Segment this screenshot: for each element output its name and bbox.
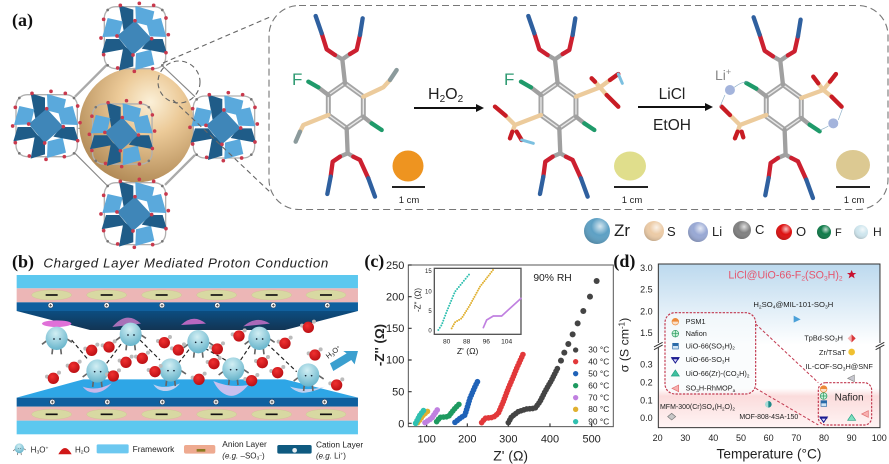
- reaction arrow LiCl EtOH: EtOH: [653, 117, 691, 134]
- x axis title: Temperature (°C): [717, 446, 821, 461]
- label Li+: Li: [715, 67, 726, 83]
- panel b legend: Anion Layer: [222, 439, 267, 449]
- x tick labels: 200: [458, 434, 476, 446]
- highlight label with star: 2: [801, 275, 805, 282]
- y tick labels: 0.3: [640, 360, 653, 370]
- panel b: charged layer proton conduction: [12, 252, 363, 462]
- labelled data points: H: [753, 300, 759, 309]
- reaction arrow H2O2: [414, 86, 484, 112]
- atom legend: [584, 218, 882, 244]
- panel b legend: O: [39, 445, 45, 454]
- hydronium ions: [42, 323, 324, 391]
- lower layers: [17, 379, 358, 434]
- label Li+: +: [726, 67, 731, 77]
- panel b legend: (e.g. Li: [316, 451, 340, 460]
- reaction arrow LiCl EtOH: LiCl: [659, 86, 685, 103]
- y tick labels: 1.5: [640, 328, 653, 338]
- atom legend: H: [873, 225, 882, 239]
- labelled data points: @MIL-101-SO: [775, 300, 825, 309]
- atom legend: Li: [712, 224, 722, 239]
- reaction arrow LiCl EtOH: [638, 86, 713, 134]
- y axis title: -Z'' (Ω): [372, 324, 387, 366]
- legend box of materials: PSM1: [686, 317, 706, 326]
- panel b legend: O: [84, 445, 90, 454]
- temperature legend: [573, 345, 609, 426]
- atom legend: O: [796, 224, 806, 239]
- inset plot: [413, 268, 521, 356]
- panel label a: (a): [12, 10, 33, 31]
- legend box of materials: 2: [747, 373, 750, 378]
- x tick labels: 50: [736, 433, 746, 443]
- y tick labels: 0.0: [640, 413, 653, 423]
- panel b legend: +: [45, 446, 48, 452]
- labelled data points: 2: [722, 406, 725, 411]
- panel d: conductivity comparison: [613, 251, 887, 461]
- legend box of materials: H): [739, 369, 747, 378]
- panel b legend: Framework: [133, 444, 175, 454]
- panel c: Nyquist plot: [364, 251, 613, 463]
- x tick labels: 70: [791, 433, 801, 443]
- labelled data points: 2: [732, 406, 735, 411]
- temperature legend: 90 °C: [588, 416, 609, 426]
- y tick labels: 50: [392, 386, 404, 398]
- y tick labels: 0.1: [640, 396, 653, 406]
- labelled data points: H@SNF: [845, 362, 873, 371]
- inset plot: 80: [443, 338, 451, 345]
- y axis title: ): [618, 318, 632, 322]
- temperature legend: 70 °C: [588, 392, 609, 402]
- y tick labels: 2.0: [640, 306, 653, 316]
- orange powder sample: [392, 150, 425, 206]
- x axis title: Z' (Ω): [493, 447, 528, 463]
- temperature legend: 50 °C: [588, 368, 609, 378]
- panel b legend: 2: [81, 450, 84, 456]
- reaction arrow H2O2: 2: [440, 94, 446, 105]
- water molecules: [45, 320, 344, 391]
- labelled data points: 4: [773, 304, 776, 310]
- x tick labels: [417, 434, 601, 446]
- x tick labels: 500: [582, 434, 601, 446]
- y tick labels: 200: [386, 291, 404, 303]
- legend box of materials: 2: [732, 346, 735, 351]
- x tick labels: 60: [764, 433, 774, 443]
- legend box of materials: 3: [696, 388, 699, 393]
- legend box of materials: [665, 313, 756, 394]
- labelled data points: Zr/TSaT: [819, 348, 846, 357]
- yellow powder sample: [614, 152, 648, 206]
- y axis title: -1: [618, 321, 627, 329]
- labelled data points: 3: [835, 338, 838, 344]
- x tick labels: 300: [499, 434, 517, 446]
- highlight label with star: 3: [824, 275, 828, 282]
- reaction arrow H2O2: 2: [458, 94, 464, 105]
- x tick labels: 80: [819, 433, 829, 443]
- legend box of materials: a: [733, 388, 736, 393]
- x tick labels: 100: [417, 434, 436, 446]
- beige powder sample: 1 cm: [844, 195, 864, 206]
- atom legend: C: [755, 222, 764, 237]
- panel b legend: Cation Layer: [316, 440, 363, 450]
- y tick labels: 150: [386, 323, 404, 335]
- labelled data points: MOF-808-4SA-150: [739, 414, 798, 421]
- inset plot: 0: [428, 328, 432, 334]
- highlight label with star: 2: [839, 275, 843, 282]
- panel b legend: 3: [36, 450, 39, 456]
- labelled data points: 3: [825, 304, 828, 310]
- inset plot: 5: [428, 309, 432, 315]
- H3O+ flow arrow: [324, 343, 358, 371]
- inset plot: 15: [425, 269, 432, 275]
- y tick labels: [640, 263, 653, 423]
- panel b legend: 3: [256, 456, 259, 462]
- labelled data points: TpBd-SO: [804, 333, 835, 342]
- highlight label with star: [728, 269, 856, 282]
- panel a: MOF structure and linker modification: [11, 1, 888, 249]
- dashed linker box: [269, 6, 888, 210]
- temperature legend: 30 °C: [588, 345, 609, 355]
- panel b legend: H: [31, 445, 36, 454]
- inset plot: -Z'' (Ω): [413, 288, 422, 312]
- labelled data points: SO: [762, 300, 773, 309]
- labelled data points: [660, 300, 873, 421]
- panel label d: (d): [613, 251, 635, 272]
- y tick labels: 250: [386, 260, 404, 272]
- Nafion inset box: Nafion: [835, 392, 864, 403]
- plot background and frame: [653, 264, 885, 428]
- legend box of materials: UiO-66(SO: [686, 341, 722, 350]
- temperature legend: 60 °C: [588, 380, 609, 390]
- orange powder sample: 1 cm: [399, 195, 419, 206]
- beige powder sample: [836, 150, 870, 206]
- reaction arrow H2O2: O: [445, 86, 458, 103]
- temperature legend: 40 °C: [588, 356, 609, 366]
- label F left: F: [292, 70, 302, 89]
- highlight label with star: (SO: [805, 269, 824, 281]
- legend box of materials: H: [725, 355, 730, 364]
- temperature legend: 80 °C: [588, 404, 609, 414]
- y axis title: σ (S cm: [618, 329, 632, 372]
- zoom connector lines: [756, 324, 818, 425]
- panel b legend: (e.g. –SO: [222, 451, 256, 460]
- panel b title: Charged Layer Mediated Proton Conduction: [43, 256, 328, 271]
- highlight label with star: H): [828, 269, 839, 281]
- inset plot: 96: [483, 338, 490, 345]
- reaction arrow H2O2: H: [428, 86, 440, 103]
- H3O+ flow arrow: H: [324, 350, 334, 361]
- panel label b: (b): [12, 252, 34, 273]
- RH label: 90% RH: [533, 273, 572, 284]
- MOF cage structure: [11, 1, 259, 249]
- legend box of materials: Nafion: [686, 329, 707, 338]
- plot axes: [408, 265, 613, 427]
- atom legend: F: [835, 227, 842, 239]
- H3O+ flow arrow: 3: [331, 352, 336, 358]
- zoom callout lines and circle: [158, 17, 270, 192]
- y tick labels: 0.2: [640, 378, 653, 388]
- panel b legend: –: [259, 452, 262, 458]
- upper layers: [17, 275, 358, 330]
- x tick labels: 90: [847, 433, 857, 443]
- panel b legend: +: [340, 452, 343, 458]
- labelled data points: H: [838, 333, 843, 342]
- high temperature points of 30C series: [558, 278, 600, 364]
- labelled data points: MFM-300(Cr)SO: [660, 404, 712, 411]
- atom legend: Zr: [614, 221, 630, 240]
- legend box of materials: H): [725, 341, 732, 350]
- H3O+ flow arrow: +: [335, 344, 341, 350]
- labelled data points: 4: [712, 406, 715, 411]
- legend box of materials: 2: [737, 373, 740, 378]
- labelled data points: H: [828, 300, 833, 309]
- panel b legend: [13, 439, 363, 462]
- highlight label with star: LiCl@UiO-66-F: [728, 269, 801, 281]
- linker molecules: [296, 16, 843, 198]
- legend box of materials: UiO-66(Zr)-(CO: [686, 369, 737, 378]
- yellow powder sample: 1 cm: [622, 195, 642, 206]
- charge caps: [42, 318, 325, 396]
- atom legend: S: [667, 224, 676, 239]
- labelled data points: 3: [843, 366, 846, 372]
- H3O+ flow arrow: O: [330, 345, 340, 356]
- Nafion inset box: [818, 383, 872, 425]
- legend box of materials: UiO-66-SO: [686, 355, 722, 364]
- inset plot: Z' (Ω): [457, 346, 479, 356]
- panel label c: (c): [364, 251, 384, 272]
- labelled data points: 2: [759, 304, 762, 310]
- y tick labels: 100: [386, 355, 404, 367]
- label F middle: F: [504, 70, 514, 89]
- panel b legend: ): [343, 451, 346, 460]
- legend box of materials: 3: [722, 346, 725, 351]
- panel b legend: ): [262, 451, 265, 460]
- x tick labels: 30: [680, 433, 690, 443]
- legend box of materials: 3: [722, 359, 725, 364]
- x tick labels: 100: [872, 433, 887, 443]
- y tick labels: 2.5: [640, 285, 653, 295]
- x tick labels: 40: [708, 433, 718, 443]
- labelled data points: IL-COF-SO: [806, 362, 843, 371]
- inset plot: 10: [425, 289, 432, 295]
- x tick labels: 400: [541, 434, 559, 446]
- inset plot: 88: [463, 338, 471, 345]
- x tick labels: 20: [653, 433, 663, 443]
- x tick labels: [653, 433, 887, 443]
- y tick labels: 3.0: [640, 263, 653, 273]
- y tick labels: 0: [398, 418, 404, 430]
- impedance series: [416, 354, 558, 423]
- proton hopping paths: [72, 340, 297, 372]
- inset plot: 104: [501, 338, 512, 345]
- labelled data points: O): [725, 404, 732, 411]
- legend box of materials: SO: [686, 384, 696, 393]
- y tick labels: [386, 260, 404, 430]
- labelled data points: (H: [715, 404, 722, 411]
- legend box of materials: H-RhMOP: [699, 384, 733, 393]
- panel b legend: H: [75, 445, 81, 454]
